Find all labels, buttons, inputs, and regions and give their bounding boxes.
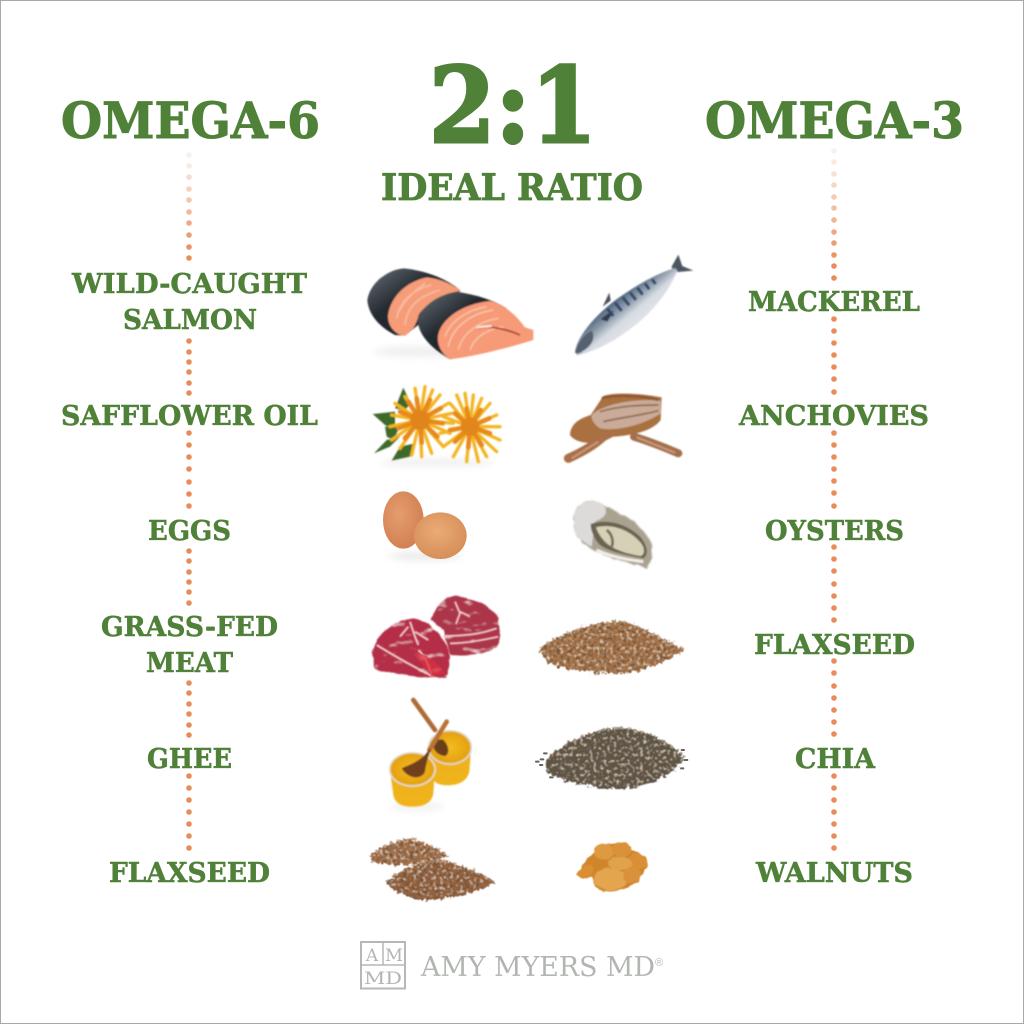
icon: oyster bbox=[574, 501, 652, 568]
panel: omega-6 column bbox=[61, 91, 320, 889]
dotted line: omega-6 bbox=[186, 152, 192, 851]
heading: omega-6: OMEGA-6 bbox=[61, 91, 320, 150]
icon: anchovies bbox=[568, 394, 678, 458]
registered mark: ® bbox=[655, 957, 663, 969]
label: grass-fed meat: MEAT bbox=[146, 647, 234, 679]
label: flaxseed: FLAXSEED bbox=[109, 857, 270, 889]
logo mark: AM MD monogram: MD bbox=[364, 969, 402, 989]
panel: omega-3 column bbox=[705, 91, 964, 889]
panel: ideal ratio header bbox=[381, 44, 643, 209]
logo wordmark: AMY MYERS MD bbox=[420, 951, 655, 983]
label: oysters: OYSTERS bbox=[765, 515, 904, 547]
icon: ghee jars with spoons bbox=[390, 700, 471, 810]
label: flaxseed: FLAXSEED bbox=[754, 629, 915, 661]
label: walnuts: WALNUTS bbox=[755, 857, 913, 889]
logo mark: AM MD monogram bbox=[361, 942, 405, 989]
label: eggs: EGGS bbox=[148, 515, 231, 547]
heading: omega-3: OMEGA-3 bbox=[705, 91, 964, 150]
icon: mackerel fish bbox=[575, 255, 693, 355]
subtitle: ideal ratio: IDEAL RATIO bbox=[381, 167, 643, 209]
logo mark: AM MD monogram: M bbox=[385, 946, 403, 966]
label: grass-fed meat: GRASS-FED bbox=[101, 611, 278, 643]
ratio number: 2:1 bbox=[429, 44, 597, 167]
icon: flaxseed pile (omega-3) bbox=[540, 621, 685, 673]
label: wild-caught salmon bbox=[71, 268, 308, 336]
icon: salmon steaks bbox=[367, 268, 533, 359]
icon: safflower blossoms bbox=[373, 387, 500, 467]
logo: Amy Myers MD bbox=[361, 942, 663, 989]
dotted line: omega-3 bbox=[831, 148, 837, 851]
label: grass-fed meat bbox=[101, 611, 278, 679]
label: wild-caught salmon: SALMON bbox=[123, 304, 257, 336]
logo mark: AM MD monogram: A bbox=[365, 946, 379, 966]
label: anchovies: ANCHOVIES bbox=[738, 400, 929, 432]
icon: grass-fed beef bbox=[372, 597, 500, 678]
label: safflower oil: SAFFLOWER OIL bbox=[61, 400, 318, 432]
icon: walnut bbox=[576, 842, 647, 891]
icon: brown eggs bbox=[383, 491, 467, 561]
label: wild-caught salmon: WILD-CAUGHT bbox=[71, 268, 308, 300]
icon: chia seed pile bbox=[536, 727, 687, 788]
label: ghee: GHEE bbox=[147, 743, 232, 775]
label: mackerel: MACKEREL bbox=[748, 286, 920, 318]
icon: flaxseed piles (omega-6) bbox=[370, 839, 496, 900]
label: chia: CHIA bbox=[795, 743, 876, 775]
